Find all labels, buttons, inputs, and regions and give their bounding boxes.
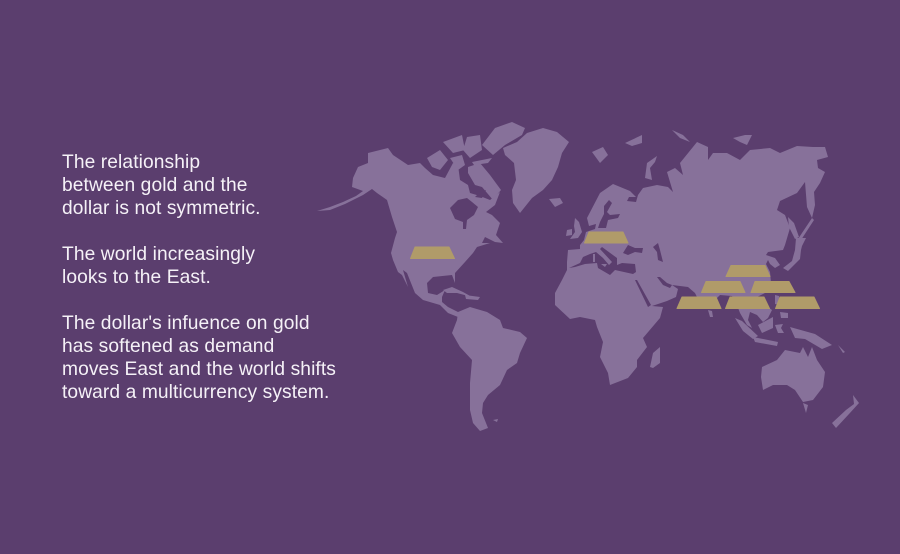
gold bar: Asia middle left (702, 282, 745, 292)
gold bar: Asia bottom right (776, 297, 820, 308)
text: East statement: The world increasingly (62, 244, 255, 265)
map: Mediterranean islands (593, 254, 607, 267)
text: dollar influence statement: moves East and the world shifts (62, 359, 336, 380)
map: land masses (317, 122, 859, 431)
gold bar: Asia middle right (751, 282, 795, 292)
British Isles (566, 218, 582, 239)
text: dollar influence statement: has softened as demand (62, 336, 274, 357)
text: dollar influence statement: The dollar's infuence on gold (62, 313, 310, 334)
Greenland and Iceland (503, 128, 569, 213)
Hudson Bay (450, 190, 486, 229)
gold bars (410, 232, 820, 308)
Arctic islands (427, 122, 525, 200)
North America (317, 148, 503, 317)
text: dollar influence statement: toward a multicurrency system. (62, 382, 329, 403)
Africa and Eurasia (555, 142, 828, 385)
gold bar: United States (410, 247, 454, 258)
Arctic Eurasian islands (592, 130, 752, 180)
text: relationship statement: dollar is not symmetric. (62, 198, 261, 219)
text block: key messages (62, 152, 336, 403)
gold bar: Asia bottom centre (726, 297, 770, 308)
Madagascar and Sri Lanka (650, 310, 713, 368)
Caribbean islands (443, 287, 480, 300)
Black Sea, Caspian, Red Sea, Persian Gulf, Baltic (598, 200, 672, 307)
gold bar: Asia top (726, 266, 770, 276)
text: East statement (62, 244, 255, 288)
gold bar: Asia bottom left (677, 297, 721, 308)
Japan and Sakhalin (783, 217, 814, 271)
gold bar: Europe (584, 232, 628, 243)
text: dollar influence statement (62, 313, 336, 403)
text: relationship statement: between gold and the (62, 175, 248, 196)
text: relationship statement: The relationship (62, 152, 200, 173)
text: relationship statement (62, 152, 261, 219)
Southeast Asian islands (735, 295, 845, 353)
text: East statement: looks to the East. (62, 267, 211, 288)
South America (452, 307, 527, 431)
map: inland seas (450, 190, 672, 307)
Australia, Tasmania, New Zealand (761, 347, 859, 428)
Mediterranean (569, 247, 636, 275)
